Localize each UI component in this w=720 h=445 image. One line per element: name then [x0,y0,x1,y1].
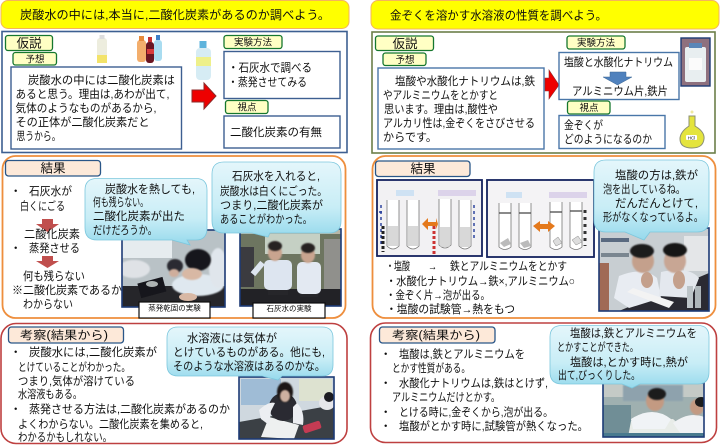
callout: solution speech bubble [167,327,333,380]
results list: ※二酸化炭素であるか [12,283,122,297]
callout: hydrochloric acid speech bubble: 塩酸の方は,鉄が [615,168,699,182]
results list [10,184,122,311]
discussion text: 塩酸がとかす時に,試験管が熱くなった。 [399,419,588,433]
results list [386,259,575,316]
heading: discussion tag [8,327,124,343]
prediction text box: あると思う。理由は,あわが出て, [16,87,170,101]
heading: results tag [376,161,470,176]
method text box [224,52,340,98]
heading: hypothesis tag: 仮説 [392,36,418,51]
panel: left column title [1,0,349,28]
caption: limewater photo: 石灰水の実験 [266,303,312,313]
heading: prediction tag [383,53,426,66]
heading: hypothesis tag [376,36,434,51]
results list: ・ [10,186,21,198]
prediction text box [378,68,544,149]
callout: limewater speech bubble: つまり,二酸化炭素が [220,198,324,212]
heading: results tag [6,160,100,176]
callout: hydrochloric acid speech bubble: 泡を出しているね。 [603,182,685,196]
arrow: red right arrow [192,83,216,109]
method text box: ・蒸発させてみる [228,75,307,89]
heading: method tag: 実験方法 [577,37,615,49]
icon: three bottles [137,35,162,63]
method text box: ・石灰水で調べる [228,62,312,74]
callout: limewater speech bubble: 炭酸水は白くにごった。 [220,184,327,198]
photo: two boys watching tubes [599,228,709,311]
panel: right column title [371,0,719,29]
discussion text: とける時に,金ぞくから,泡が出る。 [399,405,553,419]
heading: prediction tag: 予想 [395,54,415,66]
callout: heating speech bubble: だけだろうか。 [93,224,157,237]
icon: HCl flask [680,110,704,148]
discussion text: ・ [10,404,21,416]
prediction text box: 気体のようなものがあるから, [16,101,156,115]
prediction text box: アルカリ性は,金ぞくをさびさせる [383,116,535,130]
results list: 鉄とアルミニウムをとかす [450,259,567,273]
callout: hydrochloric acid speech bubble [594,160,709,240]
method box: 塩酸と水酸化ナトリウム [564,55,673,69]
heading: results tag: 結果 [410,162,436,176]
results list: ・塩酸の試験管→熱をもつ [386,302,515,316]
prediction text box: やアルミニウムをとかすと [383,89,498,102]
callout: heating speech bubble: 炭酸水を熱しても, [105,182,195,196]
diagram: test tube record two [487,180,594,257]
icon: HCl flask: HCl [688,136,695,140]
heading: viewpoint tag: 視点 [237,102,257,114]
callout: hydrochloric acid speech bubble: だんだんとけて, [615,197,698,210]
callout: limewater speech bubble: あることがわかった。 [220,212,312,226]
prediction text box: 思います。理由は,酸性や [384,102,498,116]
panel: right discussion [370,323,716,442]
photo: student writing [239,377,335,439]
heading: viewpoint tag [226,100,268,114]
prediction text box: からです。 [383,131,437,144]
heading: hypothesis tag: 仮説 [16,36,42,50]
photo: evaporation experiment [118,230,227,307]
arrow: blue down arrow [603,72,632,85]
callout: heating speech bubble [85,178,207,245]
photo: reagent bottle [681,38,710,86]
discussion text: とかす性質がある。 [392,361,470,375]
discussion text: 蒸発させる方法は,二酸化炭素があるのか [29,402,230,416]
diagram: test tube record one [377,180,482,256]
callout: heating speech bubble: 二酸化炭素が出た [93,209,185,223]
callout: reflection speech bubble [550,326,709,388]
panel: right hypothesis [372,32,715,153]
photo: limewater experiment [240,229,341,306]
viewpoint text box: どのようになるのか [564,133,652,146]
prediction text box: 思うから。 [16,130,60,143]
discussion text: 水酸化ナトリウムは,鉄はとけず, [399,376,548,390]
callout: solution speech bubble: そのような水溶液はあるのかな。 [173,360,325,373]
callout: limewater speech bubble [212,162,341,237]
discussion text: わかるかもしれない。 [18,431,112,444]
heading: viewpoint tag: 視点 [579,102,599,114]
callout: limewater speech bubble: 石灰水を入れると, [232,170,320,183]
viewpoint text box [559,116,665,148]
caption: limewater photo [253,303,325,318]
discussion text: ・ [380,407,391,419]
discussion text: つまり,気体が溶けている [18,374,135,388]
discussion text: よくわからない。二酸化炭素を集めると, [18,417,203,431]
callout: reflection speech bubble: 塩酸は,鉄とアルミニウムを [570,326,697,340]
arrow: red right arrow [545,70,559,99]
results list: 白くにごる [20,199,65,213]
callout: reflection speech bubble: 塩酸は,とかす時に,熱が [570,355,689,369]
prediction text box: 塩酸や水酸化ナトリウムは,鉄 [395,74,536,88]
discussion text: ・ [10,347,21,359]
results list: ・ [10,243,21,255]
discussion text: 塩酸は,鉄とアルミニウムを [399,347,525,361]
prediction text box: 炭酸水の中には二酸化炭素は [28,73,175,87]
heading: method tag: 実験方法 [234,36,272,48]
icon: sparkling water bottle [196,41,211,80]
panel: left results [2,156,346,318]
method box [559,52,679,100]
results list: ・金ぞく片→泡が出る。 [386,288,490,302]
discussion text: ・ [380,378,391,390]
heading: method tag [567,36,625,49]
discussion text: アルミニウムだけとかす。 [392,391,500,404]
heading: hypothesis tag [6,36,52,50]
icon: bottle one [97,35,107,63]
results list: 二酸化炭素 [24,227,80,241]
discussion text [380,347,588,433]
callout: reflection speech bubble: とかすことができた。 [557,340,638,354]
discussion text: ・ [380,349,391,361]
discussion text: ・ [380,421,391,433]
viewpoint text box: 二酸化炭素の有無 [230,125,322,139]
caption: evaporation photo: 蒸発乾固の実験 [148,302,201,312]
prediction text box [11,67,182,149]
heading: discussion tag: 考察(結果から) [20,329,108,342]
heading: prediction tag: 予想 [25,54,45,66]
results list: 石灰水が [29,184,73,198]
discussion text [10,345,230,444]
callout: solution speech bubble: とけているものがある。他にも, [173,345,325,359]
results list: ・水酸化ナトリウム→鉄×,アルミニウム○ [386,274,575,288]
heading: discussion tag: 考察(結果から) [392,329,480,342]
callout: solution speech bubble: 水溶液には気体が [187,331,278,345]
results list: → [428,261,437,273]
heading: method tag [224,36,282,48]
panel: right column title: 金ぞくを溶かす水溶液の性質を調べよう。 [390,8,607,22]
panel: right results [372,156,716,318]
discussion text: 水溶液もある。 [18,388,82,401]
results list: 何も残らない [23,269,85,283]
heading: discussion tag [380,327,495,343]
discussion text: 炭酸水には,二酸化炭素が [29,345,158,359]
results list: 蒸発させる [29,241,80,255]
panel: left hypothesis [2,32,347,152]
heading: prediction tag [13,52,56,66]
prediction text box: その正体が二酸化炭素だと [16,115,150,129]
panel: left discussion [1,324,347,444]
results list: ・塩酸 [386,259,410,273]
callout: reflection speech bubble: 出て,びっくりした。 [558,369,640,382]
caption: evaporation photo [139,302,210,318]
photo: students recording [603,383,707,437]
discussion text: とけていることがわかった。 [18,360,130,374]
heading: results tag: 結果 [40,162,66,176]
method box: アルミニウム片,鉄片 [572,84,668,98]
viewpoint text box: 金ぞくが [564,118,604,132]
viewpoint text box [224,116,340,148]
heading: viewpoint tag [568,101,610,114]
panel: left column title: 炭酸水の中には,本当に,二酸化炭素があるのか調べよう。 [20,7,330,22]
callout: heating speech bubble: 何も残らない。 [93,195,148,209]
results list: わからない [23,298,73,311]
